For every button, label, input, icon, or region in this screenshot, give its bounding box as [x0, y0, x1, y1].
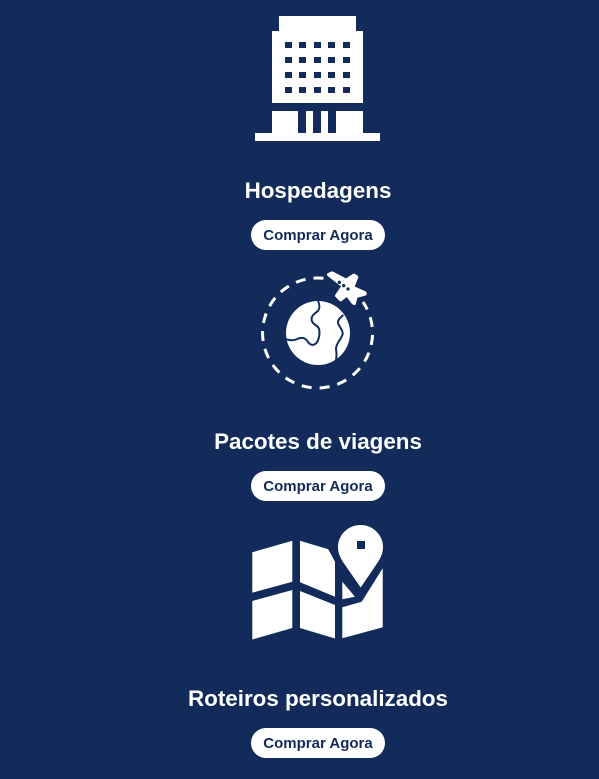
button: Comprar Agora (Hospedagens): [251, 220, 385, 250]
heading: Pacotes de viagens: Pacotes de viagens: [214, 429, 422, 454]
heading: Hospedagens: Hospedagens: [245, 178, 391, 203]
button: Comprar Agora (Pacotes de viagens): [251, 471, 385, 501]
icon: hotel building: [255, 16, 380, 141]
heading: Roteiros personalizados: Roteiros personalizados: [188, 686, 448, 711]
icon: globe with plane: [261, 271, 374, 390]
icon: folded map with pin: [252, 525, 383, 640]
button: Comprar Agora (Roteiros personalizados): [251, 728, 385, 758]
button: Comprar Agora (Pacotes de viagens): Comprar Agora: [263, 478, 373, 495]
button: Comprar Agora (Roteiros personalizados): Comprar Agora: [263, 735, 373, 752]
button: Comprar Agora (Hospedagens): Comprar Agora: [263, 227, 373, 244]
